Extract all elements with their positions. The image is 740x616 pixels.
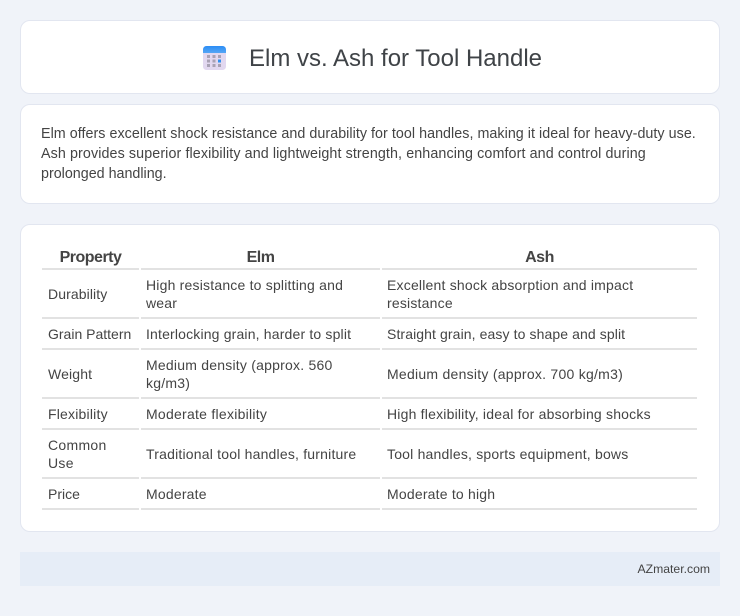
Weight Ash: Medium density (approx. 700 kg/m3) (387, 366, 623, 382)
summary text (41, 126, 696, 182)
Durability Ash: resistance (387, 295, 453, 311)
Weight Elm: kg/m3) (146, 375, 190, 391)
Grain Pattern Elm: Interlocking grain, harder to split (146, 326, 351, 342)
title: Elm vs. Ash for Tool Handle (249, 45, 542, 72)
summary text: Ash provides superior flexibility and lightweight strength, enhancing comfort and control during (41, 146, 646, 162)
row: Common Use: Use (48, 455, 74, 471)
row: Grain Pattern: Grain Pattern (48, 326, 131, 342)
row: Common Use (48, 437, 107, 471)
footer text: AZmater.com (638, 562, 710, 576)
table panel (20, 224, 720, 532)
row: Durability: Durability (48, 286, 107, 302)
Durability Ash (387, 277, 634, 311)
row: Common Use: Common (48, 437, 107, 453)
header panel (20, 20, 720, 94)
Durability Elm: wear (146, 295, 177, 311)
Common Use Elm: Traditional tool handles, furniture (146, 446, 356, 462)
row: Price: Price (48, 486, 80, 502)
summary panel (20, 104, 720, 204)
Durability Elm (146, 277, 343, 311)
Flexibility Ash: High flexibility, ideal for absorbing shocks (387, 406, 651, 422)
row: Weight: Weight (48, 366, 92, 382)
Durability Elm: High resistance to splitting and (146, 277, 343, 293)
icon: calendar (203, 46, 226, 70)
footer bar (20, 552, 720, 586)
Grain Pattern Ash: Straight grain, easy to shape and split (387, 326, 625, 342)
table header: Elm: Elm (247, 249, 274, 266)
table header: Ash: Ash (525, 249, 554, 266)
table header: Property: Property (60, 249, 121, 266)
Weight Elm: Medium density (approx. 560 (146, 357, 332, 373)
row: Flexibility: Flexibility (48, 406, 108, 422)
Price Ash: Moderate to high (387, 486, 495, 502)
Weight Elm (146, 357, 332, 391)
Flexibility Elm: Moderate flexibility (146, 406, 267, 422)
Common Use Ash: Tool handles, sports equipment, bows (387, 446, 628, 462)
Price Elm: Moderate (146, 486, 207, 502)
summary text: Elm offers excellent shock resistance and durability for tool handles, making it ideal for heavy-duty use. (41, 126, 696, 142)
summary text: prolonged handling. (41, 166, 167, 182)
Durability Ash: Excellent shock absorption and impact (387, 277, 633, 293)
